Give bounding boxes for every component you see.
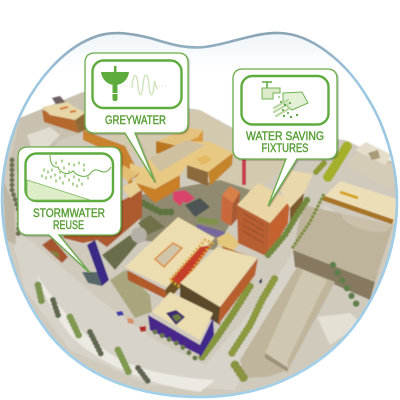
photo of site model	[0, 92, 400, 400]
small orange tower	[221, 195, 233, 226]
purple block	[148, 315, 200, 355]
icon frame	[92, 60, 182, 108]
shrubs	[143, 203, 175, 212]
label: water saving: WATER SAVING	[246, 131, 324, 143]
cars	[116, 311, 124, 316]
callout bubble	[233, 69, 337, 206]
icon: tap	[262, 82, 280, 99]
top-left building	[52, 96, 66, 106]
orange building behind stormwater callout	[63, 190, 142, 247]
icon: sloped ground	[27, 180, 90, 200]
dark courtyard	[185, 198, 210, 217]
label: greywater: GREYWATER	[105, 115, 166, 127]
left tree line	[12, 160, 20, 235]
label: reuse: REUSE	[53, 220, 84, 232]
icon frame	[26, 154, 113, 201]
right courtyard	[317, 313, 358, 344]
icon: sink	[101, 66, 129, 101]
callout bubble	[18, 147, 121, 273]
low annex	[217, 232, 240, 252]
street planting	[38, 285, 150, 384]
callout bubble	[85, 53, 188, 182]
rear cream block	[280, 170, 313, 208]
road and sidewalk	[10, 205, 340, 390]
planting plots	[102, 235, 138, 270]
main orange tower	[237, 205, 270, 257]
road trees	[202, 143, 360, 380]
greywater orange building	[83, 130, 140, 180]
icon: washing hands	[274, 92, 308, 118]
striped roof	[170, 245, 212, 285]
east orange block	[180, 283, 222, 325]
callout: water saving fixtures	[233, 69, 337, 206]
pink pavilion	[173, 190, 195, 206]
callout: stormwater reuse	[18, 147, 121, 273]
lower beige building	[240, 267, 335, 378]
icon: cloud outline	[50, 155, 111, 176]
glass sphere	[131, 227, 147, 243]
icon: wave	[123, 75, 167, 95]
centre cream building	[127, 270, 168, 300]
right beige building	[293, 250, 375, 300]
purple tower and pool	[82, 272, 102, 286]
red post	[242, 159, 246, 185]
icon frame	[242, 76, 328, 124]
ground	[0, 92, 400, 400]
icon: rain drops	[41, 159, 89, 188]
label: fixtures: FIXTURES	[262, 143, 309, 155]
label: stormwater: STORMWATER	[33, 208, 105, 220]
callout: greywater	[85, 53, 188, 182]
